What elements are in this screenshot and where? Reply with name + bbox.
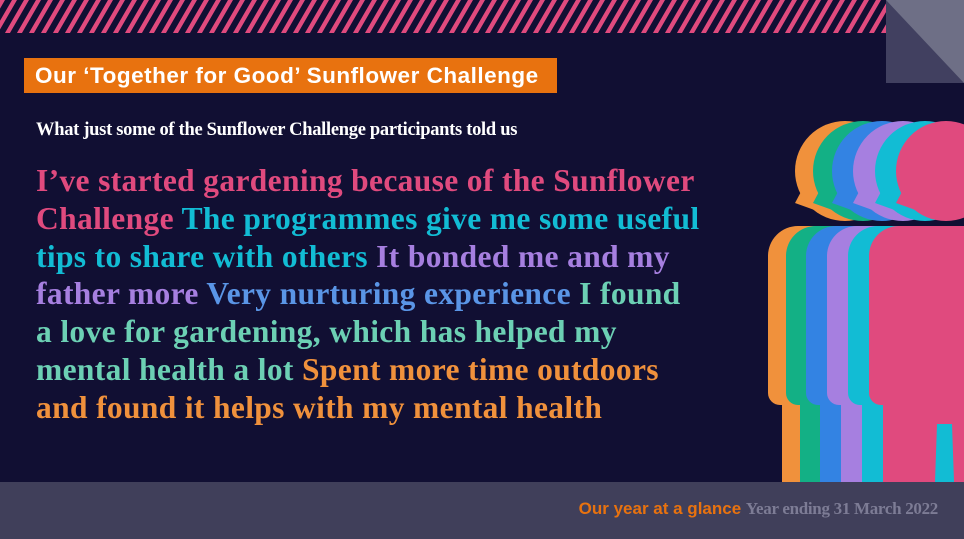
quotes text block: tips to share with others It bonded me and my <box>36 239 670 274</box>
quotes text block <box>36 163 699 425</box>
quotes text block: father more Very nurturing experience I found <box>36 276 681 311</box>
footer bar <box>0 482 964 539</box>
quotes text block: and found it helps with my mental health <box>36 390 602 425</box>
quotes text block: mental health a lot Spent more time outdoors <box>36 352 659 387</box>
footer text: Our year at a glance Year ending 31 March 2022 <box>579 499 938 518</box>
quotes text block: I’ve started gardening because of the Sunflower <box>36 163 695 198</box>
quotes text block: Challenge The programmes give me some useful <box>36 201 699 236</box>
subheading: What just some of the Sunflower Challenge participants told us <box>36 120 517 140</box>
top stripes <box>0 0 886 33</box>
title banner: Our ‘Together for Good’ Sunflower Challenge <box>35 63 539 88</box>
corner block <box>886 0 964 83</box>
title banner <box>24 58 557 93</box>
quotes text block: a love for gardening, which has helped my <box>36 314 617 349</box>
